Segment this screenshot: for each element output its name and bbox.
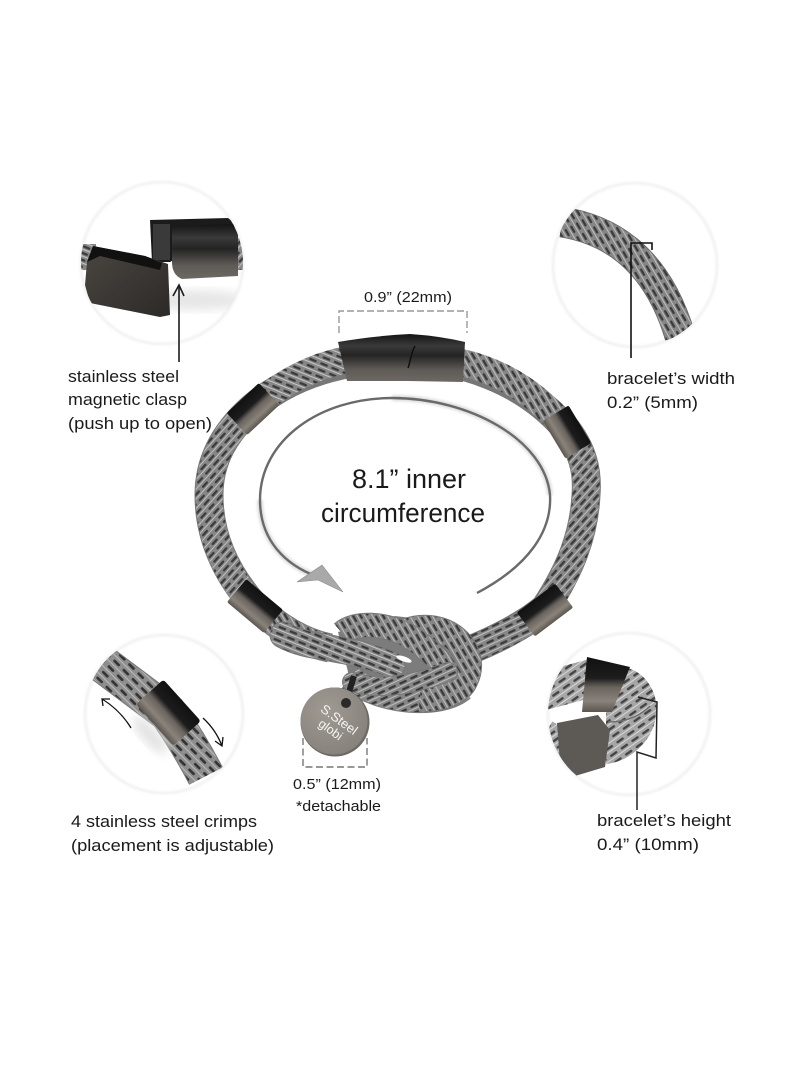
rope segment bottom right <box>470 610 545 650</box>
arrow: slide left <box>102 699 131 728</box>
clasp right block <box>172 224 238 279</box>
arrow: clasp pointer <box>173 285 184 362</box>
detail circle: magnetic clasp <box>80 182 246 344</box>
height bracket line <box>637 697 657 810</box>
text: height label: bracelet’s height <box>597 811 731 830</box>
text: width label: 0.2” (5mm) <box>607 393 698 412</box>
upper crimp close-up <box>582 657 630 712</box>
dimension bracket: tag size <box>303 738 367 767</box>
text: tag size: 0.5” (12mm) <box>293 777 381 793</box>
knot <box>283 616 473 706</box>
bracelet <box>209 334 591 706</box>
circumference arrow <box>260 398 550 593</box>
text: width label: bracelet’s width <box>607 369 735 388</box>
rope segment bottom left <box>253 604 330 648</box>
text: clasp label: magnetic clasp <box>68 390 187 409</box>
text: clasp label <box>68 367 212 433</box>
pendant tag: globi <box>316 716 345 743</box>
detail circle: crimps <box>85 635 243 793</box>
clasp left block <box>85 246 170 317</box>
rope outline <box>209 358 586 650</box>
dimension bracket: clasp width <box>339 311 467 333</box>
pendant tag: S.Steel <box>318 701 361 738</box>
magnetic clasp <box>338 334 465 382</box>
pendant tag <box>300 676 370 756</box>
arrow: slide right <box>203 718 223 746</box>
text: clasp label: (push up to open) <box>68 414 212 433</box>
text: clasp size: 0.9” (22mm) <box>364 290 452 306</box>
crimp close-up <box>136 679 201 746</box>
text: clasp label: stainless steel <box>68 367 179 386</box>
text: tag size: *detachable <box>296 799 381 815</box>
text: crimps label <box>71 812 274 855</box>
text: inner circumference: circumference <box>321 498 485 528</box>
lower crimp close-up <box>557 715 610 776</box>
rope segment left <box>209 408 253 606</box>
text: height label <box>597 811 731 854</box>
text: inner circumference <box>321 464 485 528</box>
width bracket line <box>631 243 652 358</box>
text: height label: 0.4” (10mm) <box>597 835 699 854</box>
detail circle: bracelet height <box>540 633 710 810</box>
text: tag size <box>293 777 381 815</box>
detail circle: bracelet width <box>553 183 717 358</box>
text: crimps label: 4 stainless steel crimps <box>71 812 257 831</box>
crimp bottom right <box>517 584 573 636</box>
text: inner circumference: 8.1” inner <box>352 464 466 494</box>
crimp top right <box>543 405 591 459</box>
rope segment top left <box>252 360 345 408</box>
text: crimps label: (placement is adjustable) <box>71 836 274 855</box>
rope segment top right <box>460 362 567 430</box>
crimp bottom left <box>227 579 283 633</box>
text: width label <box>607 369 735 412</box>
clasp upper bar <box>150 218 238 262</box>
rope segment right <box>545 430 586 610</box>
crimp top left <box>227 383 279 435</box>
